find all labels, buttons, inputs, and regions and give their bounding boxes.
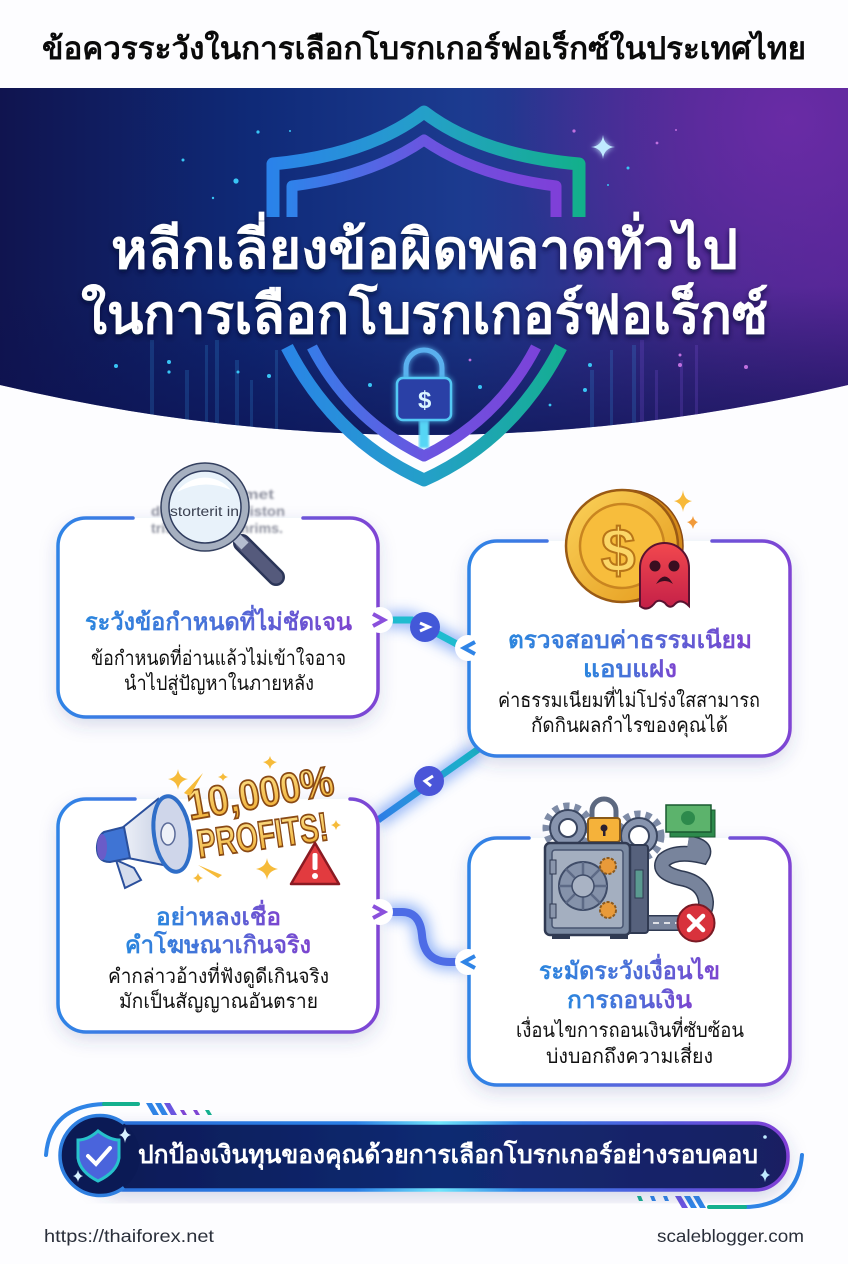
icon: 10,000% profits badge: PROFITS!: [194, 805, 331, 867]
icon: gears: [546, 806, 661, 858]
description: [108, 962, 329, 1013]
decorative dashes: [146, 1103, 706, 1208]
connector: card 1 to card 2: [382, 612, 468, 650]
icon: warning triangle: [291, 843, 339, 884]
icon: glowing padlock: $: [418, 387, 432, 414]
panel: exaggerated ads: [58, 756, 393, 1032]
blurred fine print: distorterit in liiston: [151, 503, 285, 519]
stars: [114, 130, 630, 406]
description: ค่าธรรมเนียมที่ไม่โปร่งใสสามารถ: [498, 686, 760, 712]
hero banner: [0, 88, 848, 448]
description: กัดกินผลกำไรของคุณได้: [531, 714, 728, 738]
icon: 10,000% profits badge: 10,000%: [183, 757, 337, 829]
connector: card 3 to card 4: [385, 912, 468, 962]
blurred fine print: trisims of thimrims.: [151, 520, 283, 536]
heading: [125, 899, 311, 959]
heading: [508, 627, 752, 683]
hero heading: [81, 211, 768, 345]
arrow tab: [455, 949, 481, 975]
panel: withdrawal conditions: [455, 799, 790, 1085]
icon: glowing padlock: [397, 350, 451, 448]
icon: winding road: [640, 843, 706, 923]
description: [516, 1016, 744, 1068]
icon: banknotes: [666, 805, 715, 837]
description: บ่งบอกถึงความเสี่ยง: [546, 1042, 713, 1068]
shield lower arcs: [287, 347, 561, 480]
arrow tab: [367, 899, 393, 925]
connector glow: [378, 620, 478, 962]
description: ข้อกำหนดที่อ่านแล้วไม่เข้าใจอาจ: [91, 644, 346, 670]
heading: คำโฆษณาเกินจริง: [125, 930, 311, 959]
description: คำกล่าวอ้างที่ฟังดูดีเกินจริง: [108, 962, 329, 989]
heading: แอบแฝง: [583, 656, 677, 683]
description: นำไปสู่ปัญหาในภายหลัง: [124, 672, 314, 696]
heading: ระมัดระวังเงื่อนไข: [539, 953, 720, 985]
icon: magnifying glass: [161, 463, 276, 577]
heading: ตรวจสอบค่าธรรมเนียม: [508, 627, 752, 654]
description: เงื่อนไขการถอนเงินที่ซับซ้อน: [516, 1016, 744, 1042]
icon: padlock: [588, 799, 620, 842]
blurred fine print: [151, 486, 285, 536]
panel: unclear terms: [58, 463, 393, 717]
footer link left: https://thaiforex.net: [44, 1226, 214, 1246]
panel: hidden fees: [455, 490, 790, 756]
icon: 10,000% profits badge: [183, 757, 337, 867]
icon: gold coin and ghost: [566, 490, 698, 609]
footer link right: scaleblogger.com: [657, 1226, 804, 1246]
arrow tab: [367, 607, 393, 633]
heading: การถอนเงิน: [567, 987, 693, 1014]
heading: อย่าหลงเชื่อ: [156, 899, 281, 931]
data light columns: [150, 340, 698, 435]
shield upper arcs: [273, 112, 579, 217]
icon: megaphone: [97, 794, 195, 888]
description: [498, 686, 760, 738]
icon: gold coin and ghost: $: [601, 517, 635, 586]
sparkles: [760, 1135, 770, 1182]
description: มักเป็นสัญญาณอันตราย: [119, 988, 318, 1013]
decorative arcs: [46, 1104, 802, 1207]
description: [91, 644, 346, 696]
callout banner: [60, 1116, 788, 1196]
icon: red cross badge: [678, 904, 714, 942]
blurred fine print: ffiritnus amet: [164, 486, 274, 502]
banner text: ปกป้องเงินทุนของคุณด้วยการเลือกโบรกเกอร์อย่างรอบคอบ: [138, 1139, 758, 1171]
arrow tab: [455, 635, 481, 661]
hero heading: ในการเลือกโบรกเกอร์ฟอเร็กซ์: [81, 283, 768, 345]
heading: ระวังข้อกำหนดที่ไม่ชัดเจน: [85, 604, 353, 636]
connector: card 2 to card 3: [378, 748, 480, 820]
icon: sparkles: [168, 756, 341, 883]
heading: [539, 953, 720, 1014]
sparkle: [591, 135, 615, 159]
icon: check shield badge: [60, 1116, 140, 1196]
title: ข้อควรระวังในการเลือกโบรกเกอร์ฟอเร็กซ์ในประเทศไทย: [42, 29, 806, 66]
icon: steel safe: [545, 843, 648, 939]
hero heading: หลีกเลี่ยงข้อผิดพลาดทั่วไป: [111, 211, 738, 280]
icon: magnifying glass: storterit in: [170, 504, 239, 519]
